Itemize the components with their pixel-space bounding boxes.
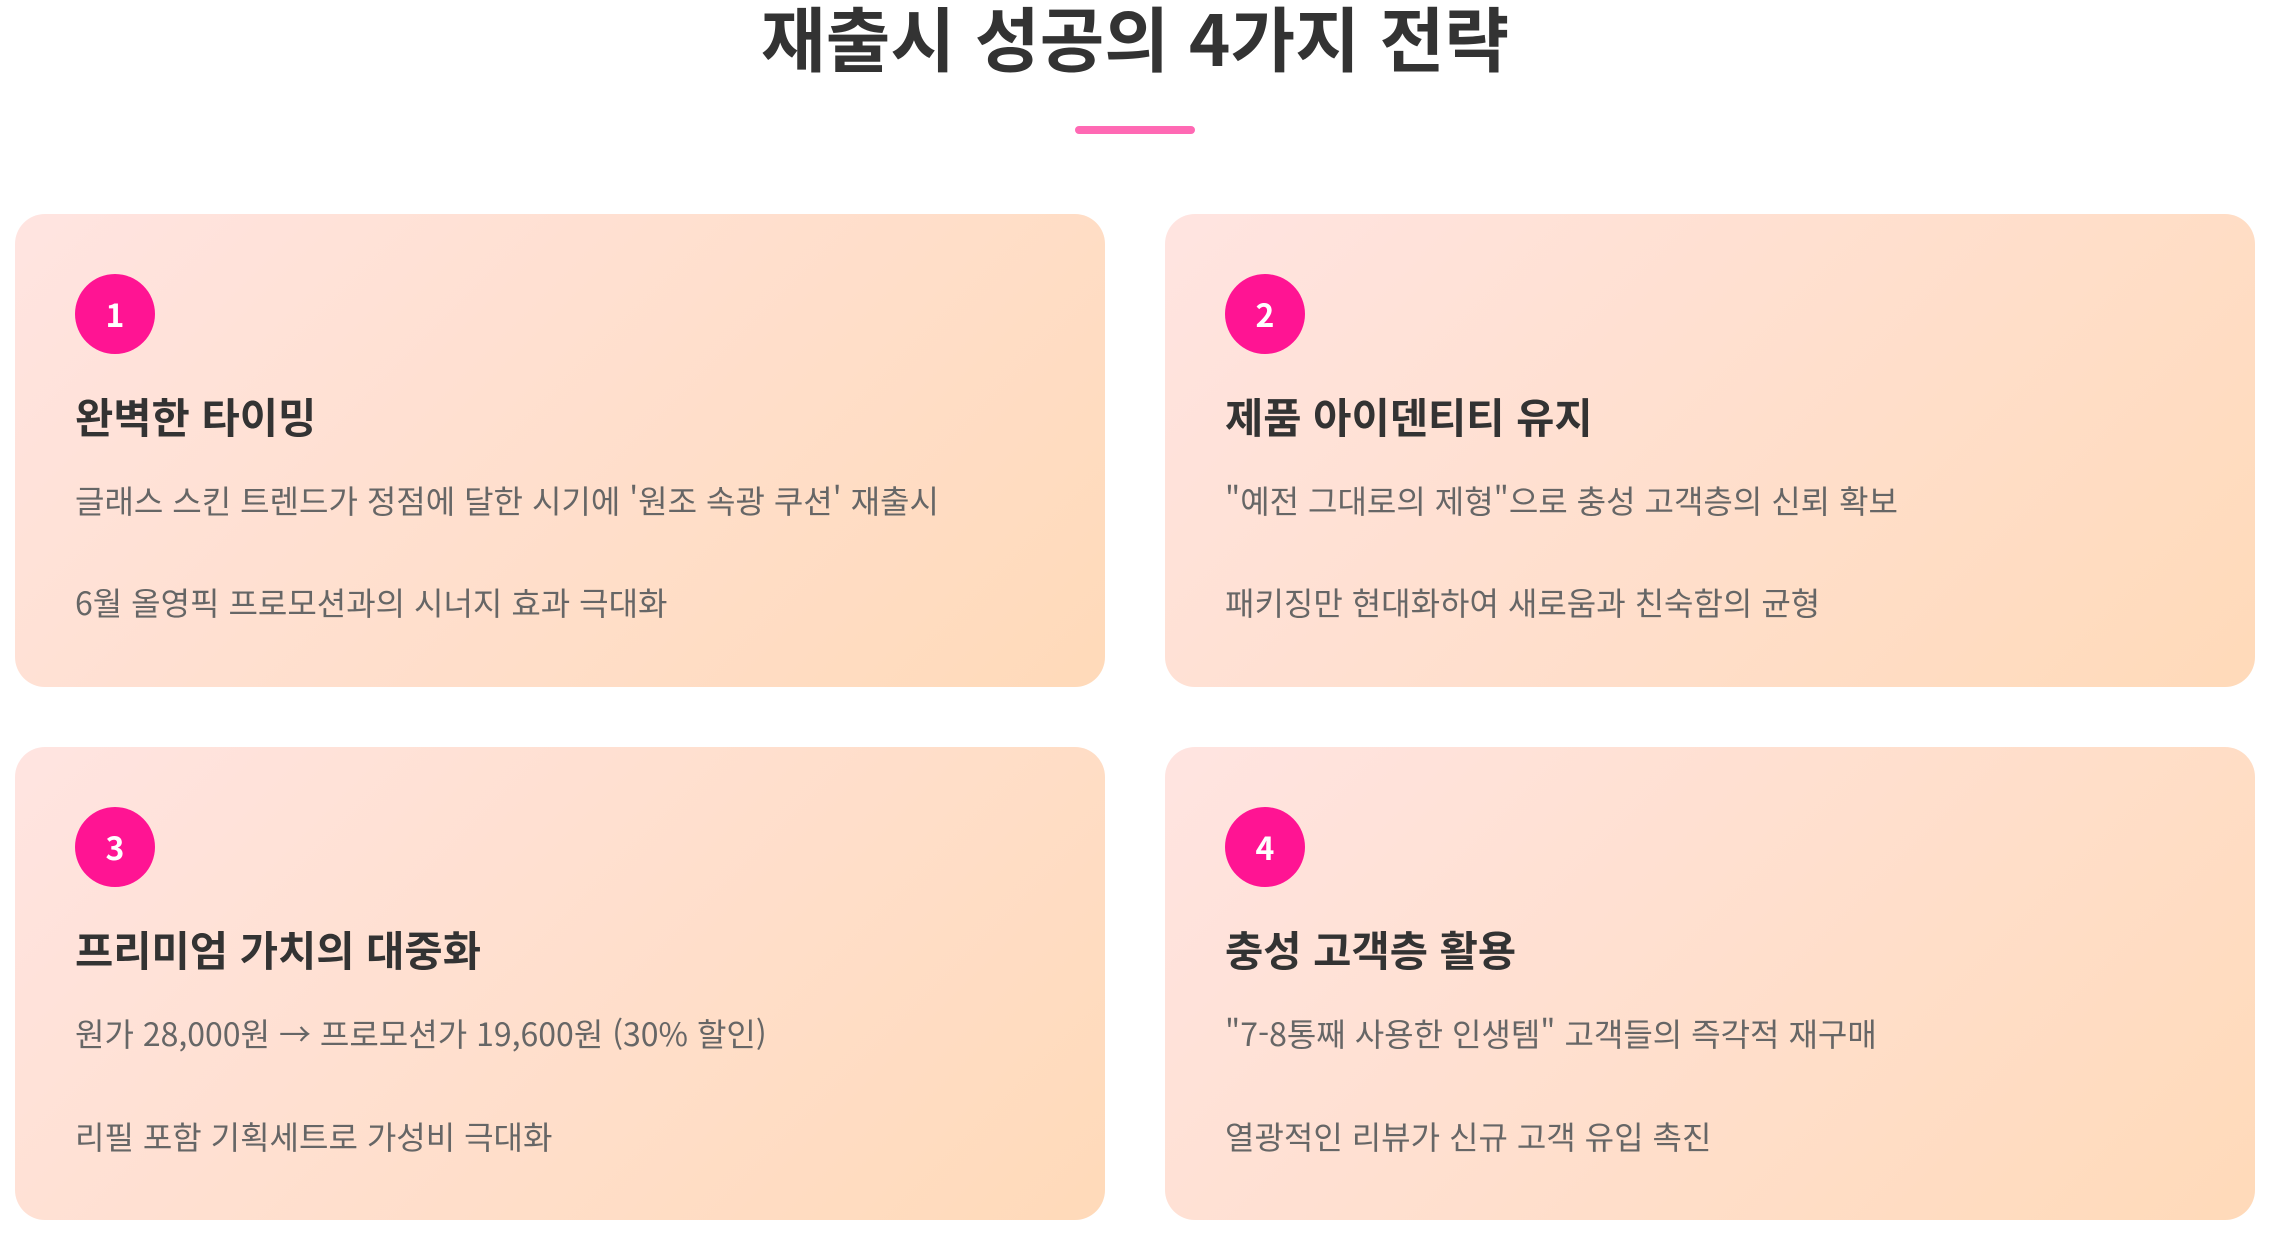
number badge 2 [1225, 274, 1305, 354]
text: strategy 1 line 2: 6월 올영픽 프로모션과의 시너지 효과 극대화 [75, 579, 667, 625]
heading: strategy 3: 프리미엄 가치의 대중화 [75, 918, 481, 978]
text: strategy 2 line 1: "예전 그대로의 제형"으로 충성 고객층의 신뢰 확보 [1225, 477, 1898, 523]
number badge 1 [75, 274, 155, 354]
panel: strategy 2 [1165, 214, 2255, 687]
title underline accent [1075, 126, 1195, 134]
panel: strategy 4 [1165, 747, 2255, 1220]
text: strategy 1 line 1: 글래스 스킨 트렌드가 정점에 달한 시기에 '원조 속광 쿠션' 재출시 [75, 477, 939, 523]
panel: strategy 3 [15, 747, 1105, 1220]
text: strategy 4 line 1: "7-8통째 사용한 인생템" 고객들의 즉각적 재구매 [1225, 1010, 1877, 1056]
panel: strategy 1 [15, 214, 1105, 687]
heading: strategy 4: 충성 고객층 활용 [1225, 918, 1516, 978]
text: strategy 3 line 2: 리필 포함 기획세트로 가성비 극대화 [75, 1113, 552, 1159]
number badge 1: 1 [106, 291, 124, 337]
text: strategy 3 line 1: 원가 28,000원 → 프로모션가 19,600원 (30% 할인) [75, 1010, 767, 1056]
text: strategy 4 line 2: 열광적인 리뷰가 신규 고객 유입 촉진 [1225, 1113, 1711, 1159]
heading: strategy 1: 완벽한 타이밍 [75, 384, 316, 444]
text: strategy 2 line 2: 패키징만 현대화하여 새로움과 친숙함의 균형 [1225, 579, 1820, 625]
number badge 2: 2 [1256, 291, 1274, 337]
number badge 3 [75, 807, 155, 887]
number badge 3: 3 [106, 824, 124, 870]
number badge 4: 4 [1256, 824, 1274, 870]
number badge 4 [1225, 807, 1305, 887]
heading: strategy 2: 제품 아이덴티티 유지 [1225, 384, 1593, 444]
